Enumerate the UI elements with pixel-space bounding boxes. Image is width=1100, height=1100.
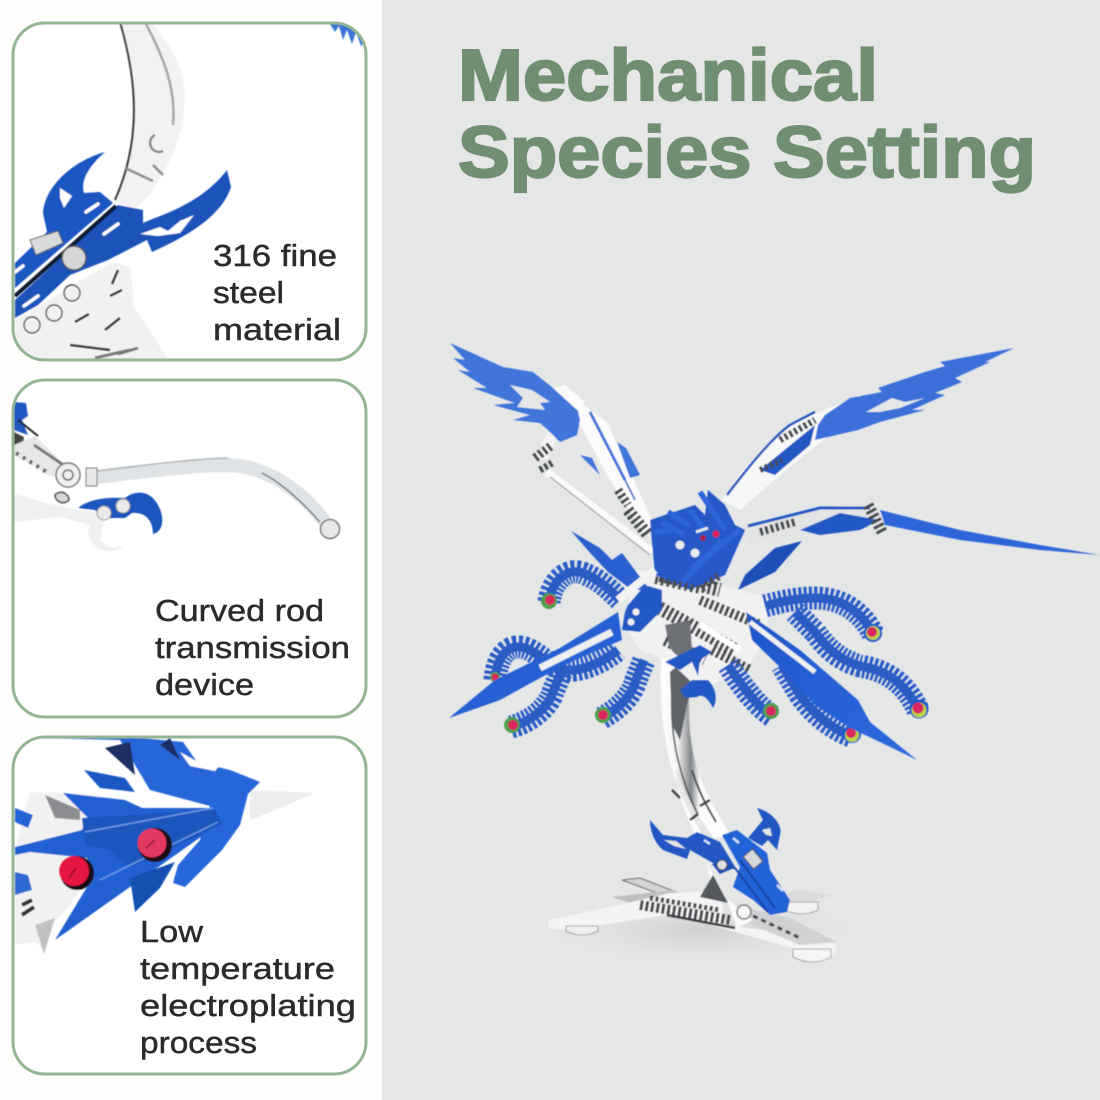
peacock eye spots xyxy=(490,593,928,743)
panel 2 caption xyxy=(155,593,350,702)
panel 3 caption: Low xyxy=(140,914,204,949)
title: Species Setting xyxy=(458,113,1036,193)
foot: left xyxy=(566,926,598,935)
blue foot plate and horns xyxy=(650,808,790,915)
upper left wing xyxy=(450,343,585,442)
background: left white column xyxy=(0,0,382,1100)
panel 3 border xyxy=(13,737,366,1074)
detail photo: stand and blue foot plate xyxy=(15,20,366,362)
panel 3 caption: process xyxy=(140,1025,257,1060)
background: right grey panel xyxy=(382,0,1100,1100)
main illustration: mechanical phoenix model xyxy=(449,343,1100,968)
foot: front right xyxy=(793,949,831,962)
floor shadow xyxy=(520,892,880,968)
tail feathers xyxy=(490,572,928,743)
lower body mechanism xyxy=(625,570,770,690)
panel 3 caption: temperature xyxy=(140,951,335,986)
panel 1 caption xyxy=(213,238,341,347)
panel 2 caption: transmission xyxy=(155,630,350,665)
panel 1 border xyxy=(13,23,366,360)
tail spine group xyxy=(495,572,918,736)
head with red eyes xyxy=(650,490,745,590)
panel 2 card background xyxy=(13,380,366,717)
curved stand xyxy=(661,640,753,928)
panel: curved rod transmission device xyxy=(13,380,366,717)
panel 3 caption: electroplating xyxy=(140,988,356,1023)
long tail blades xyxy=(449,531,917,760)
title xyxy=(458,36,1036,193)
tail barbs group xyxy=(495,572,918,736)
silver wing arms and rod xyxy=(535,395,885,555)
right horn xyxy=(748,808,780,850)
panel 1 caption: material xyxy=(213,312,341,347)
detail photo: curved rod and claw xyxy=(14,402,340,551)
panel 2 border xyxy=(13,380,366,717)
left shoulder joint xyxy=(618,570,662,632)
upper right wing xyxy=(815,348,1014,440)
panel 2 caption: Curved rod xyxy=(155,593,324,628)
panel 3 card background xyxy=(13,737,366,1074)
panel 2 caption: device xyxy=(155,667,254,702)
panel: 316 fine steel material xyxy=(13,20,366,362)
panel 1 caption: 316 fine xyxy=(213,238,337,273)
panel 3 caption xyxy=(140,914,356,1060)
left horn xyxy=(650,820,737,870)
foot: back right xyxy=(785,902,818,914)
panel 1 card background xyxy=(13,23,366,360)
blue claws under body xyxy=(665,645,716,708)
base with four silver feet xyxy=(548,878,837,962)
panel 1 caption: steel xyxy=(213,275,284,310)
title: Mechanical xyxy=(458,36,878,116)
detail photo: blue head with red bolts xyxy=(15,738,315,954)
plate xyxy=(722,830,790,915)
long right wing xyxy=(880,510,1100,555)
panel: low temperature electroplating process xyxy=(13,737,366,1074)
